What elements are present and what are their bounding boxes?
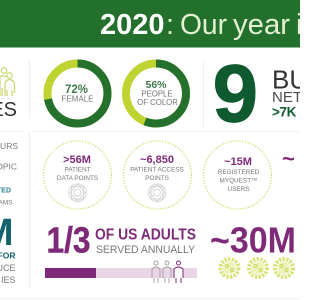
text block: left column fragment (0, 141, 18, 206)
label: 56%: 56% (145, 79, 167, 91)
icon: virus (249, 259, 267, 277)
stat: ~30M: ~30M (210, 220, 296, 260)
icon: three adults (152, 261, 183, 283)
partial tilde: ~ (282, 146, 295, 171)
stat: 1/3: 1/3 (46, 220, 90, 260)
label: users: USERS (227, 186, 250, 193)
label: of color: OF COLOR (137, 98, 178, 107)
label: 72%: 72% (65, 84, 88, 96)
icon: people group (0, 68, 14, 96)
label: people of color: PEOPLE (141, 90, 173, 98)
title: 2020 (100, 9, 165, 41)
title: Our (180, 9, 227, 41)
text: served annually: SERVED ANNUALLY (96, 244, 196, 256)
label: female: FEMALE (61, 94, 94, 104)
label: myquest: MYQUEST™ (220, 178, 258, 184)
text: IES: IES (1, 275, 16, 285)
icon: network globe (69, 184, 86, 202)
label: patient access: PATIENT ACCESS (130, 166, 184, 174)
icon: network globe (148, 184, 166, 202)
chart: 72% female donut (48, 64, 108, 124)
label: data points: DATA POINTS (57, 175, 98, 182)
header banner (0, 0, 302, 48)
label: registered: REGISTERED (218, 169, 260, 176)
bar: one third (45, 268, 197, 278)
panel: registered myquest users (204, 141, 272, 209)
number: ~6,850: ~6,850 (140, 154, 174, 166)
title: year (233, 9, 290, 41)
label: points: POINTS (145, 175, 169, 182)
icon: virus (275, 259, 293, 277)
panel: patient access points (124, 141, 192, 209)
number: ~15M: ~15M (224, 156, 252, 168)
title: : (166, 9, 174, 41)
text: of us adults: OF US ADULTS (95, 226, 196, 244)
panel: patient data points (44, 141, 112, 209)
number: >56M: >56M (63, 154, 91, 166)
big number 9: 9 (212, 48, 258, 140)
label: patient: PATIENT (64, 166, 91, 174)
icon: virus (220, 259, 238, 277)
chart: 56% people of color donut (126, 64, 186, 124)
